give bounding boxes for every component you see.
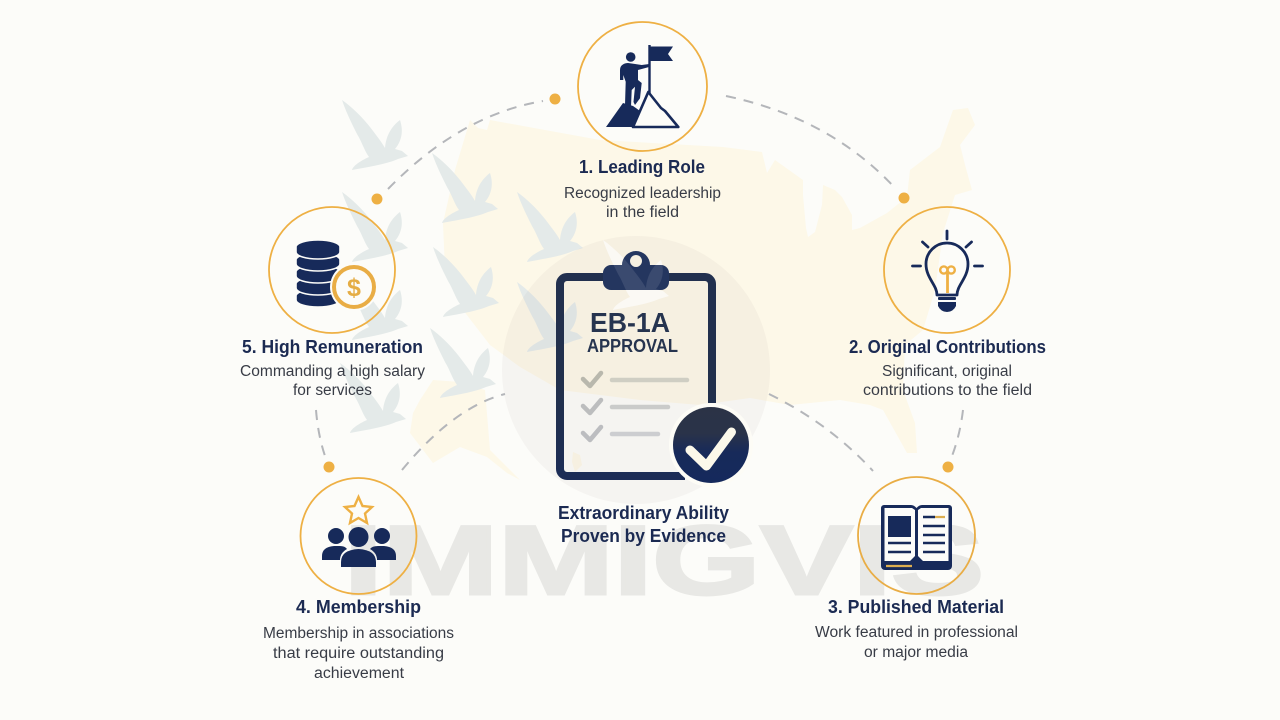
description — [263, 625, 454, 682]
dashed connector arcs — [316, 96, 963, 471]
panel: 2. Original Contributions — [849, 207, 1046, 399]
central caption — [558, 502, 730, 546]
icon: climber with flag on a mountain — [578, 22, 707, 151]
approval badge — [669, 403, 753, 487]
central backdrop circle — [502, 236, 770, 504]
icon: coin stack with dollar coin — [269, 207, 395, 333]
description — [815, 624, 1018, 661]
panel: 3. Published Material — [815, 477, 1018, 661]
description — [240, 363, 425, 399]
watermark: IMMIGVIS — [344, 505, 984, 615]
icon: light bulb — [884, 207, 1010, 333]
heading: 4. Membership — [296, 596, 421, 617]
heading: 2. Original Contributions — [849, 336, 1046, 357]
panel: 1. Leading Role — [564, 22, 721, 221]
description — [564, 185, 721, 221]
description: for services — [293, 382, 372, 399]
checklist — [583, 373, 687, 440]
central caption: Extraordinary Ability — [558, 502, 730, 523]
description: in the field — [606, 204, 679, 221]
icon: coin stack with dollar coin: $ — [347, 274, 361, 302]
clipboard clip — [603, 251, 669, 290]
panel: 4. Membership — [263, 478, 454, 682]
clipboard heading — [587, 307, 678, 356]
panel: central clipboard — [560, 251, 753, 487]
description: or major media — [864, 644, 968, 661]
description: that require outstanding — [273, 645, 444, 662]
white bird behind clipboard — [603, 240, 669, 310]
clipboard heading: APPROVAL — [587, 336, 678, 356]
heading: 1. Leading Role — [579, 156, 705, 177]
description: Membership in associations — [263, 625, 454, 642]
description — [863, 363, 1032, 399]
heading: 5. High Remuneration — [242, 336, 423, 357]
panel: 5. High Remuneration — [240, 207, 425, 399]
description: achievement — [314, 665, 405, 682]
description: contributions to the field — [863, 382, 1032, 399]
connector dots — [324, 94, 954, 472]
background map of the United States — [410, 108, 975, 480]
icon: group of people with a star — [300, 478, 416, 594]
clipboard frame — [560, 277, 712, 476]
description: Recognized leadership — [564, 185, 721, 202]
background dove pattern — [340, 100, 583, 433]
white bird overlay on clip — [603, 240, 669, 310]
description: Commanding a high salary — [240, 363, 425, 380]
clipboard heading: EB-1A — [590, 307, 670, 338]
heading: 3. Published Material — [828, 596, 1004, 617]
icon: open book — [858, 477, 975, 594]
description: Work featured in professional — [815, 624, 1018, 641]
central caption: Proven by Evidence — [561, 525, 726, 546]
description: Significant, original — [882, 363, 1012, 380]
